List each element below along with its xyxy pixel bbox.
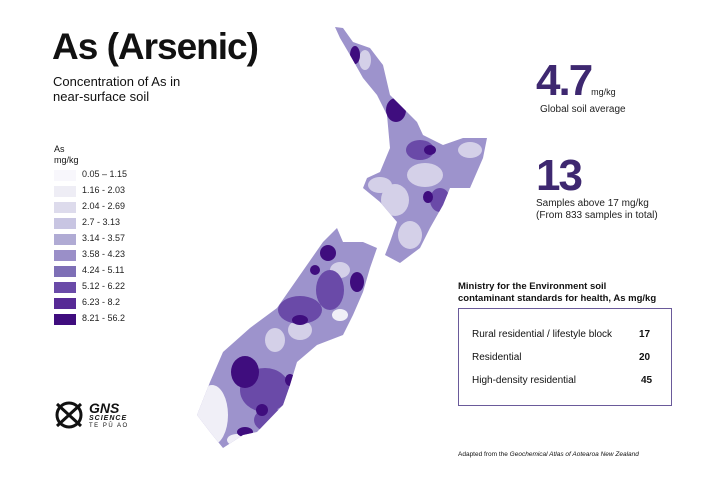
text: 1.16 - 2.03 — [82, 185, 125, 195]
stat: samples above — [536, 151, 658, 221]
source note: Adapted from the Geochemical Atlas of Aotearoa New Zealand — [458, 451, 639, 458]
legend: As — [54, 144, 65, 154]
standards heading — [458, 281, 656, 304]
standards heading: Ministry for the Environment soil — [458, 281, 606, 292]
standards table: 45 — [641, 375, 652, 386]
text: 6.23 - 8.2 — [82, 297, 120, 307]
legend: mg/kg — [54, 155, 79, 165]
standards table: 17 — [639, 329, 650, 340]
standards table: Residential — [472, 352, 521, 363]
text: 2.04 - 2.69 — [82, 201, 125, 211]
text: 3.58 - 4.23 — [82, 249, 125, 259]
logo: GNS Science: TE PŪ AO — [89, 423, 129, 429]
logo: GNS Science: GNS — [89, 400, 119, 416]
logo: GNS Science: SCIENCE — [89, 415, 127, 422]
standards table — [458, 308, 672, 406]
text: 5.12 - 6.22 — [82, 281, 125, 291]
standards table: High-density residential — [472, 375, 576, 386]
text: 3.14 - 3.57 — [82, 233, 125, 243]
standards heading: contaminant standards for health, As mg/kg — [458, 293, 656, 304]
text: 0.05 – 1.15 — [82, 169, 127, 179]
stat: global average: 4.7mg/kg — [536, 56, 616, 105]
stat: samples above: 13 — [536, 151, 581, 200]
standards table: Rural residential / lifestyle block — [472, 329, 612, 340]
map: New Zealand — [197, 27, 487, 448]
stat: samples above: Samples above 17 mg/kg — [536, 198, 649, 209]
title: As (Arsenic) — [52, 26, 258, 67]
text: 8.21 - 56.2 — [82, 313, 125, 323]
text: 2.7 - 3.13 — [82, 217, 120, 227]
standards table: 20 — [639, 352, 650, 363]
legend — [54, 144, 79, 165]
logo: GNS Science — [56, 400, 129, 429]
stat: samples above: (From 833 samples in total) — [536, 210, 658, 221]
subtitle: near-surface soil — [53, 89, 149, 104]
text: 4.24 - 5.11 — [82, 265, 124, 275]
stat: global average: Global soil average — [540, 104, 626, 115]
subtitle: Concentration of As in — [53, 74, 180, 89]
subtitle — [53, 74, 180, 104]
